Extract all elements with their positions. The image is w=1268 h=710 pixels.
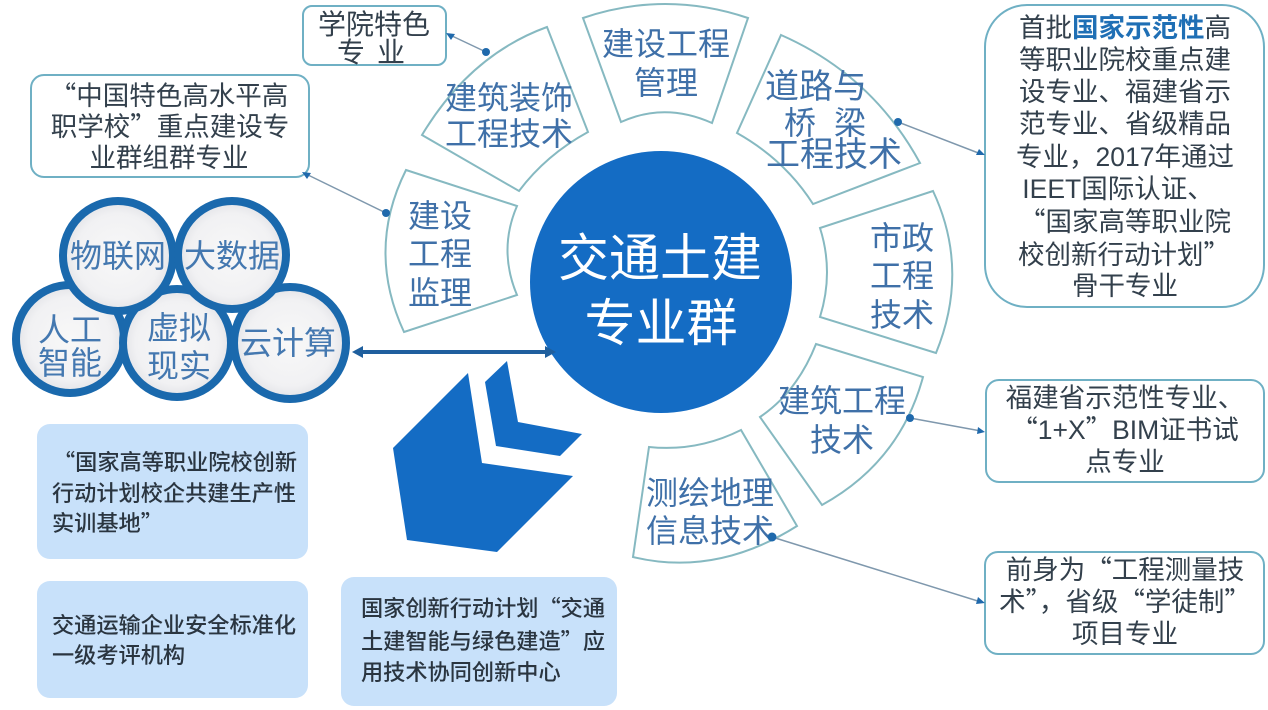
connector: 建筑工程技术 to 福建省示范性 [906, 414, 985, 434]
segment: 道路与桥梁工程技术: 道路与 [765, 59, 867, 108]
connector: 建筑装饰 to 学院特色 [446, 33, 490, 56]
segment: 建设工程管理: 管理 [634, 58, 698, 104]
segment: 建筑工程技术: 建筑工程 [778, 376, 906, 422]
segment: 道路与桥梁工程技术: 梁 [834, 98, 866, 144]
circle: 物联网 [63, 201, 173, 311]
callout: 中国特色高水平高职学校: “中国特色高水平高 [50, 74, 288, 113]
connector: 测绘地理 to 前身为 [768, 532, 985, 604]
circle: 虚拟现实 [123, 289, 231, 397]
segment: 建设工程监理: 工程 [408, 229, 472, 275]
segment: 建设工程监理: 建设 [408, 191, 472, 237]
icon: small chevron [485, 361, 582, 456]
callout: 中国特色高水平高职学校: 业群组群专业 [90, 136, 248, 175]
segment: 建筑装饰工程技术: 工程技术 [445, 109, 573, 155]
circle: 人工智能: 人工 [38, 305, 102, 351]
panel: 协同创新中心: 土建智能与绿色建造”应 [361, 624, 605, 656]
callout: 学院特色专业: 业 [377, 31, 405, 71]
segment: 测绘地理信息技术: 测绘地理 [646, 468, 774, 514]
callout: 前身为工程测量技术 [985, 548, 1264, 654]
callout: 中国特色高水平高职学校: 职学校”重点建设专 [51, 105, 289, 144]
callout: 首批国家示范性高等职业院校: 专业，2017年通过 [1016, 135, 1234, 174]
circle: 人工智能: 智能 [38, 338, 102, 384]
segment: 道路与桥梁工程技术: 桥 [784, 98, 816, 144]
callout: 前身为工程测量技术: 术”，省级“学徒制” [999, 580, 1251, 619]
callout: 学院特色专业: 专 [337, 31, 365, 71]
circle: 云计算 [234, 287, 346, 399]
segment: 建设工程管理 [583, 4, 748, 123]
circle: 物联网: 物联网 [70, 231, 166, 277]
segment: 建设工程监理 [385, 170, 517, 332]
segment: 建筑装饰工程技术 [422, 27, 588, 191]
panel: 交通运输企业安全标准化: 一级考评机构 [52, 638, 185, 670]
panel: 协同创新中心: 国家创新行动计划“交通 [361, 591, 605, 623]
callout: 福建省示范性专业: “1+X”BIM证书试 [1011, 408, 1239, 447]
panel: 校企共建生产性实训基地: 行动计划校企共建生产性 [52, 476, 296, 508]
callout: 福建省示范性专业: 点专业 [1085, 440, 1165, 479]
callout: 首批国家示范性高等职业院校 [985, 5, 1264, 307]
segment: 建筑工程技术: 技术 [810, 415, 874, 461]
circle: 大数据 [178, 201, 286, 309]
segment: 建设工程监理: 监理 [408, 268, 472, 314]
panel: 交通运输企业安全标准化: 交通运输企业安全标准化 [52, 608, 296, 640]
panel: 交通运输企业安全标准化 [37, 581, 308, 698]
segment: 建设工程管理: 建设工程 [602, 19, 730, 65]
circle: 人工智能 [16, 285, 124, 393]
callout: 首批国家示范性高等职业院校: 骨干专业 [1072, 264, 1178, 303]
panel: 协同创新中心 [341, 577, 617, 706]
circle: 虚拟现实: 虚拟 [147, 303, 211, 349]
central circle: 交通土建专业群: 专业群 [584, 282, 738, 356]
segment: 道路与桥梁工程技术 [737, 35, 920, 204]
callout: 福建省示范性专业: 福建省示范性专业、 [1006, 376, 1244, 415]
segment: 建筑工程技术 [760, 344, 923, 505]
double arrow between circles and center [352, 346, 556, 358]
callout: 首批国家示范性高等职业院校: 首批国家示范性高 [1019, 6, 1231, 45]
callout: 前身为工程测量技术: 前身为“工程测量技 [1006, 548, 1244, 587]
segment: 道路与桥梁工程技术: 工程技术 [766, 127, 902, 176]
segment: 测绘地理信息技术: 信息技术 [646, 506, 774, 552]
panel: 协同创新中心: 用技术协同创新中心 [361, 655, 561, 687]
connector: 道路与桥梁 to 国家示范性 [894, 118, 985, 155]
panel: 校企共建生产性实训基地: 实训基地” [52, 506, 163, 538]
callout: 学院特色专业 [303, 3, 446, 71]
technology circles cluster [16, 201, 346, 399]
segment: 市政工程技术: 工程 [870, 251, 934, 297]
callout: 首批国家示范性高等职业院校: 等职业院校重点建 [1019, 38, 1231, 77]
icon: large chevron [393, 373, 573, 552]
callout: 学院特色专业: 学院特色 [318, 3, 430, 43]
central circle: 交通土建专业群 [530, 151, 792, 413]
segment: 建筑装饰工程技术: 建筑装饰 [445, 73, 573, 119]
callout: 首批国家示范性高等职业院校: 范专业、省级精品 [1019, 102, 1231, 141]
central circle: 交通土建专业群: 交通土建 [558, 217, 762, 291]
callout: 福建省示范性专业 [986, 376, 1264, 482]
circle: 虚拟现实: 现实 [147, 341, 211, 387]
circle: 云计算: 云计算 [240, 318, 336, 364]
callout: 首批国家示范性高等职业院校: “国家高等职业院 [1019, 200, 1231, 239]
callout: 首批国家示范性高等职业院校: IEET国际认证、 [1022, 167, 1214, 206]
segment: 市政工程技术: 技术 [870, 290, 934, 336]
segment: 市政工程技术: 市政 [870, 213, 934, 259]
callout: 前身为工程测量技术: 项目专业 [1072, 612, 1178, 651]
segment: 测绘地理信息技术 [633, 430, 797, 563]
callout: 首批国家示范性高等职业院校: 设专业、福建省示 [1019, 70, 1231, 109]
connector: 建设工程监理 to 中国特色 [302, 172, 390, 217]
callout: 中国特色高水平高职学校 [31, 74, 309, 177]
callout: 首批国家示范性高等职业院校: 校创新行动计划” [1018, 233, 1230, 272]
panel: 校企共建生产性实训基地 [37, 424, 308, 559]
circle: 大数据: 大数据 [184, 231, 280, 277]
panel: 校企共建生产性实训基地: “国家高等职业院校创新 [53, 445, 297, 477]
segment: 市政工程技术 [820, 191, 952, 353]
